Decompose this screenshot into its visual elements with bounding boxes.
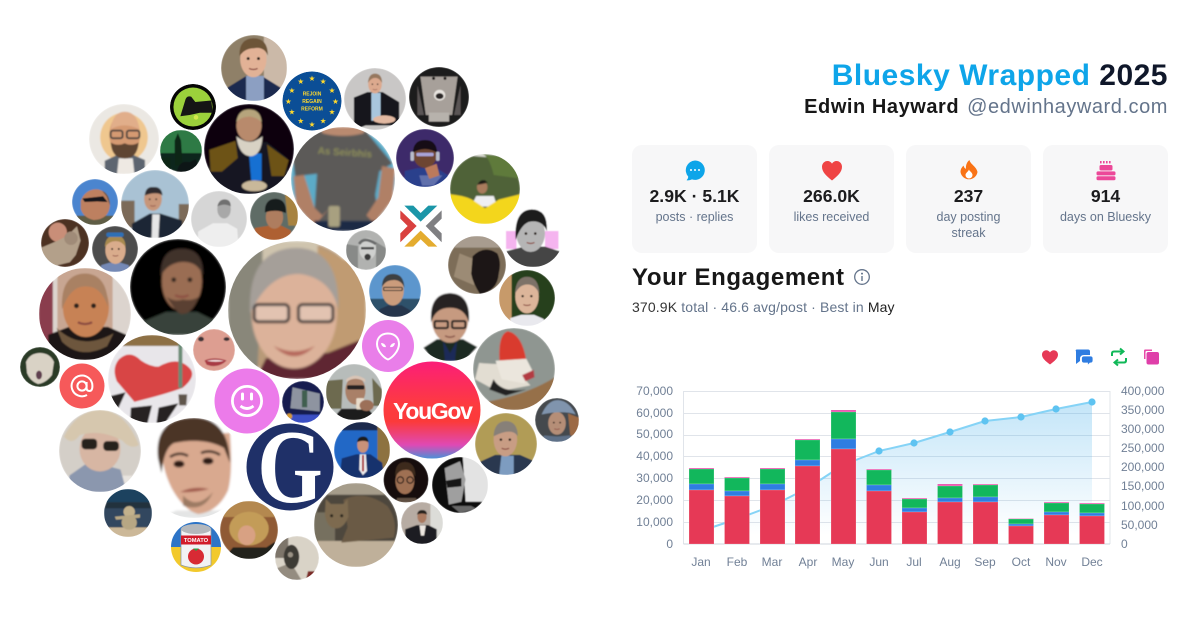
- avatar: red @ mention icon: [60, 364, 104, 408]
- bar: Jul: [902, 498, 927, 544]
- left axis labels: 0: [666, 537, 673, 551]
- avatar: pink smiley icon: [214, 368, 280, 434]
- avatar: man in grey t-shirt by sea: [291, 127, 395, 231]
- engagement summary: 370.9K total · 46.6 avg/post · Best in May: [632, 299, 895, 315]
- avatar: man holding tabby cat: [41, 219, 89, 267]
- avatar: rejoin regain reform EU badge: ★: [297, 116, 304, 125]
- month labels: Apr: [799, 555, 817, 569]
- month labels: Feb: [727, 555, 748, 569]
- avatar: rejoin regain reform EU badge: REFORM: [301, 106, 323, 112]
- avatar: black dog on green: [170, 84, 216, 130]
- avatar: rejoin regain reform EU badge: ★: [309, 120, 316, 129]
- month labels: Nov: [1045, 555, 1067, 569]
- stat card: posting streak: [906, 145, 1031, 253]
- month labels: Jun: [869, 555, 889, 569]
- avatar: man in black cap: [250, 192, 298, 240]
- month labels: Sep: [974, 555, 996, 569]
- icon: reposts arrows: [1112, 348, 1126, 366]
- avatar: bearded man in uniform painting: [204, 104, 294, 194]
- avatar: grey robot face: [409, 67, 469, 127]
- avatar: tabby cat on table: [314, 483, 398, 567]
- avatar: close-up child's face: [193, 329, 235, 371]
- avatar: man in navy jacket: [221, 35, 287, 101]
- avatar: rejoin regain reform EU badge: ★: [320, 116, 327, 125]
- right axis labels: 100,000: [1121, 499, 1165, 513]
- right axis labels: [1121, 384, 1165, 551]
- avatar: smiling man in dark jacket: [121, 170, 189, 238]
- bar: Nov: [1044, 502, 1069, 544]
- avatar: aurora night sky: [160, 130, 202, 172]
- avatar: large smiling man with glasses (profile owner): [228, 241, 366, 379]
- stat card: posts and replies: 2.9K · 5.1K: [650, 186, 739, 206]
- left axis labels: 40,000: [636, 449, 673, 463]
- avatar: man in dark portrait: [130, 239, 226, 335]
- right axis labels: 150,000: [1121, 479, 1165, 493]
- bar: Dec: [1080, 503, 1104, 544]
- chart: monthly engagement stacked bars with cumulative line: [636, 384, 1165, 569]
- stat card: posts and replies: [632, 145, 757, 253]
- avatar: man with scarf: [39, 268, 131, 360]
- avatar: grey sketch of laughing man: [346, 230, 386, 270]
- icon: replies bubbles: [1076, 350, 1093, 366]
- line points: [875, 398, 1096, 455]
- icon: flame: [960, 160, 978, 180]
- avatar: stage presentation: [282, 381, 324, 423]
- stat card: posting streak: streak: [951, 226, 986, 240]
- avatar: man in black suit: [344, 68, 406, 130]
- avatar: blonde woman: [220, 501, 278, 559]
- cumulative line: [701, 402, 1092, 531]
- avatar: rejoin regain reform EU badge: ★: [309, 74, 316, 83]
- avatar: profile man in sunglasses: [72, 179, 118, 225]
- avatar: pink alien icon: [362, 320, 414, 372]
- right axis labels: 250,000: [1121, 441, 1165, 455]
- avatar: dog in red hat: [473, 328, 555, 410]
- stat card: likes received: 266.0K: [803, 186, 860, 206]
- avatar: rejoin regain reform EU badge: REGAIN: [302, 99, 322, 105]
- left axis labels: 30,000: [636, 471, 673, 485]
- avatar: rejoin regain reform EU badge: ★: [332, 97, 339, 106]
- avatar: rejoin regain reform EU badge: ★: [289, 108, 296, 117]
- bar: May: [831, 410, 856, 544]
- bar: Jun: [866, 469, 892, 544]
- month labels: Oct: [1012, 555, 1031, 569]
- icon: info: [854, 269, 870, 285]
- avatar: cut-out of man's face: [156, 418, 232, 518]
- avatar: red heart on white wall: [108, 335, 196, 423]
- avatar: rejoin regain reform EU badge: ★: [329, 86, 336, 95]
- left axis labels: 10,000: [636, 515, 673, 529]
- profile name and handle: Edwin Hayward @edwinhayward.com: [804, 96, 1168, 118]
- left axis labels: [636, 384, 673, 551]
- stat card: posts and replies: posts · replies: [656, 210, 733, 224]
- cumulative area: [701, 402, 1092, 544]
- avatar: rejoin regain reform EU badge: ★: [289, 86, 296, 95]
- legend icons: [1042, 348, 1159, 366]
- avatar: The Guardian G logo: G: [257, 408, 323, 525]
- avatar: rejoin regain reform EU badge: ★: [320, 77, 327, 86]
- bar: Mar: [760, 468, 785, 544]
- bar: Apr: [795, 439, 820, 544]
- icon: likes heart: [1042, 350, 1058, 364]
- month labels: Jan: [691, 555, 711, 569]
- stat card: days on Bluesky: days on Bluesky: [1060, 210, 1151, 224]
- month labels: [691, 555, 1103, 569]
- avatar: bearded man in black waistcoat: [401, 502, 443, 544]
- avatar: man in blue suit with red tie: [334, 422, 390, 478]
- month labels: Jul: [906, 555, 922, 569]
- avatar: bald man with glasses, watercolour: [89, 104, 159, 174]
- icon: birthday cake: [1096, 161, 1116, 180]
- bar: Jan: [689, 468, 714, 544]
- month labels: Aug: [939, 555, 961, 569]
- title: Bluesky Wrapped 2025: [832, 59, 1168, 92]
- avatar: rejoin regain reform EU badge: ★: [297, 77, 304, 86]
- bar: Feb: [724, 477, 750, 544]
- left axis labels: 50,000: [636, 427, 673, 441]
- avatar: person in dark mask: [275, 536, 319, 580]
- avatar: man with blue sunglasses on head: [92, 226, 138, 272]
- avatar: fluffy black dog: [448, 236, 506, 294]
- heading: your engagement: Your Engagement: [632, 264, 845, 291]
- avatar: man in yellow rapeseed field: [450, 154, 520, 224]
- avatar: person with headphones: [396, 129, 454, 187]
- avatar: black and white man: [506, 208, 560, 267]
- month labels: May: [832, 555, 854, 569]
- stat card: days on Bluesky: [1043, 145, 1168, 253]
- stat card: posting streak: 237: [954, 186, 983, 206]
- right axis labels: 400,000: [1121, 384, 1165, 398]
- avatar: man in white sunhat: [59, 410, 141, 492]
- avatar: man with dark glasses and black hair: [423, 292, 478, 361]
- avatar: snowman toy on sofa: [104, 489, 152, 537]
- right axis labels: 200,000: [1121, 460, 1165, 474]
- avatar: X chevrons logo: [400, 206, 442, 247]
- avatar: man with round glasses, dark background: [384, 458, 428, 502]
- month labels: Mar: [762, 555, 782, 569]
- stat card: posting streak: day posting: [937, 210, 1000, 224]
- bar: Oct: [1008, 518, 1034, 544]
- avatar bubble cluster: [20, 35, 579, 580]
- bar: Sep: [973, 484, 998, 544]
- icon: quotes squares: [1144, 350, 1159, 364]
- avatar: man in grey t-shirt by sea: As Seirbhís: [317, 146, 373, 161]
- stat card: days on Bluesky: 914: [1091, 186, 1120, 206]
- avatar: tomato can on Ukraine colours: [171, 522, 221, 572]
- icon: speech bubble: [686, 160, 705, 180]
- right axis labels: 50,000: [1121, 518, 1158, 532]
- avatar: man drinking from mug: [326, 364, 382, 420]
- avatar: tomato can on Ukraine colours: TOMATO: [184, 538, 209, 544]
- avatar: rejoin regain reform EU badge: REJOIN: [303, 92, 322, 98]
- left axis labels: 20,000: [636, 493, 673, 507]
- right axis labels: 0: [1121, 537, 1128, 551]
- avatar: rejoin regain reform EU badge: [282, 72, 342, 130]
- avatar: high-contrast black and white portrait: [432, 457, 488, 513]
- avatar: rejoin regain reform EU badge: ★: [285, 97, 292, 106]
- stacked bars: [689, 410, 1104, 544]
- avatar: YouGov logo with gradient: YouGov: [393, 398, 473, 424]
- avatar: greyscale man in white shirt: [191, 191, 247, 247]
- stat card: likes received: likes received: [794, 210, 869, 224]
- icon: heart: [822, 161, 842, 180]
- avatar: white fluffy dog: [20, 347, 60, 387]
- left axis labels: 60,000: [636, 406, 673, 420]
- month labels: Dec: [1081, 555, 1103, 569]
- avatar: man against yellow brick wall: [475, 413, 537, 475]
- bar: Aug: [938, 484, 962, 544]
- stat card: likes received: [769, 145, 894, 253]
- left axis labels: 70,000: [636, 384, 673, 398]
- avatar: YouGov logo with gradient: [384, 362, 480, 458]
- avatar: man with glasses by lake: [369, 265, 421, 317]
- right axis labels: 350,000: [1121, 403, 1165, 417]
- avatar: man in flat cap: [535, 398, 579, 442]
- avatar: rejoin regain reform EU badge: ★: [329, 108, 336, 117]
- avatar: man with green background: [499, 270, 555, 326]
- right axis labels: 300,000: [1121, 422, 1165, 436]
